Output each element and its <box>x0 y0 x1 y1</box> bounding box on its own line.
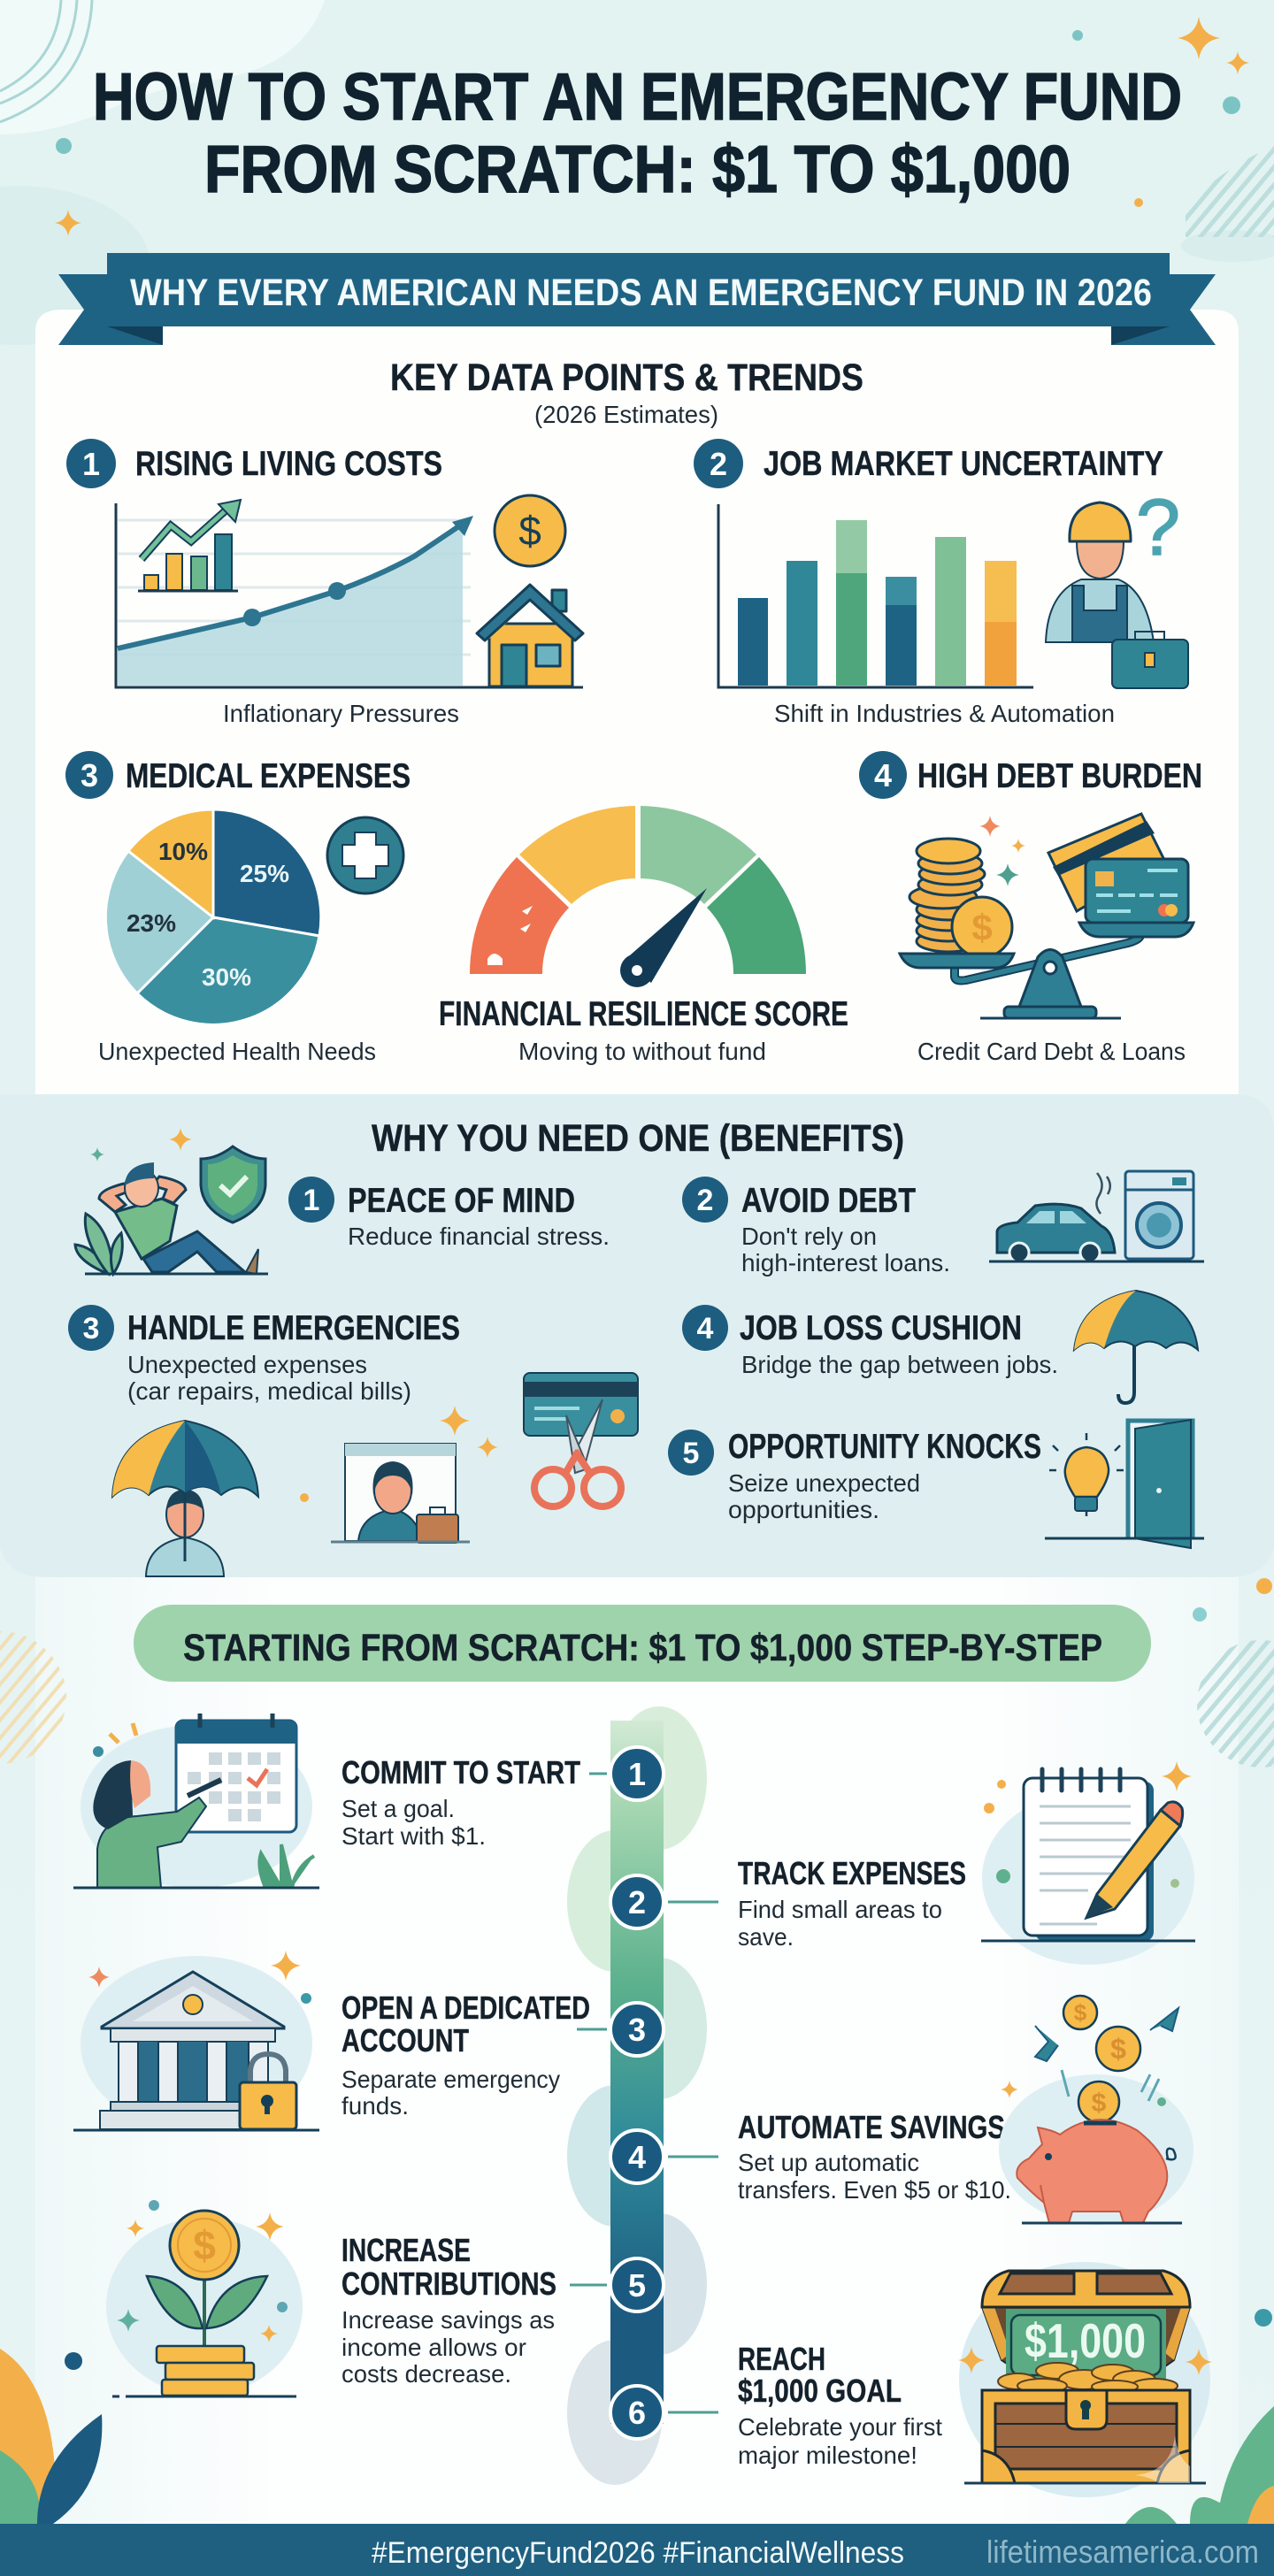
icon: umbrella <box>1074 1291 1198 1403</box>
benefit: job loss cushion: 4 <box>697 1312 714 1346</box>
benefit: opportunity knocks: 5 <box>683 1437 699 1470</box>
step 5: increase contributions <box>342 2232 556 2388</box>
icon: piggy bank with coins <box>999 1996 1193 2225</box>
step 1: commit to start <box>342 1754 580 1850</box>
benefit: job loss cushion: Bridge the gap between jobs. <box>741 1351 1058 1378</box>
benefit: opportunity knocks: Seize unexpected <box>728 1469 920 1497</box>
gauge: financial resilience score <box>439 806 848 1065</box>
panel: rising living costs <box>66 439 583 727</box>
benefit: opportunity knocks <box>668 1428 1041 1523</box>
lid <box>982 2271 1190 2307</box>
heading: key data points: KEY DATA POINTS & TRENDS <box>390 356 863 399</box>
panel: high debt burden: HIGH DEBT BURDEN <box>917 757 1202 795</box>
benefit: opportunity knocks: opportunities. <box>728 1496 879 1523</box>
benefit: handle emergencies: Unexpected expenses <box>127 1351 367 1378</box>
benefit: handle emergencies <box>68 1305 460 1405</box>
icon: piggy bank with coins: $ <box>1092 2089 1107 2118</box>
benefit: opportunity knocks: OPPORTUNITY KNOCKS <box>728 1428 1041 1466</box>
panel: job market uncertainty <box>694 439 1188 727</box>
icon: relaxed man with shield <box>75 1128 268 1274</box>
benefit: handle emergencies: (car repairs, medical bills) <box>127 1377 411 1405</box>
gauge: financial resilience score: FINANCIAL RESILIENCE SCORE <box>439 995 848 1033</box>
icon: person in browser window <box>300 1406 498 1543</box>
step 3: open a dedicated account: ACCOUNT <box>342 2022 469 2058</box>
icon: card and scissors <box>524 1373 638 1506</box>
panel: high debt burden <box>859 751 1202 1065</box>
step 6: reach goal: $1,000 GOAL <box>738 2373 902 2409</box>
benefit: avoid debt: 2 <box>697 1184 713 1217</box>
subheading: estimates: (2026 Estimates) <box>534 401 718 428</box>
gauge needle <box>620 888 707 987</box>
step 2: track expenses: save. <box>738 1923 794 1951</box>
icon: person under umbrella <box>112 1421 258 1576</box>
step 5: increase contributions: income allows or <box>342 2334 526 2361</box>
timeline <box>567 1706 718 2485</box>
benefit: avoid debt: Don't rely on <box>741 1223 877 1250</box>
step 2: track expenses <box>738 1855 966 1951</box>
panel: medical expenses: 23% <box>127 909 176 937</box>
panel: benefits band <box>0 1094 1274 1577</box>
icon: scale with coins and cards <box>900 814 1193 1018</box>
footer bar <box>0 2524 1274 2576</box>
panel: job market uncertainty: JOB MARKET UNCERTAINTY <box>764 445 1163 483</box>
icon: bank with lock <box>73 1951 319 2131</box>
panel: rising living costs: Inflationary Pressures <box>223 700 459 727</box>
step 6: reach goal: major milestone! <box>738 2442 917 2469</box>
icon: house <box>477 585 583 686</box>
icon: treasure chest with $1,000 <box>958 2262 1215 2515</box>
timeline: 2 <box>628 1884 646 1920</box>
panel: medical expenses <box>65 751 411 1065</box>
icon: mini growth chart <box>138 500 241 591</box>
icon: briefcase <box>1112 632 1188 688</box>
panel: medical expenses: Unexpected Health Needs <box>98 1038 376 1065</box>
icon: money plant <box>106 2200 303 2396</box>
connectors <box>570 1774 718 2412</box>
bill <box>1006 2309 1166 2380</box>
step 4: automate savings <box>738 2109 1011 2204</box>
benefit: peace of mind: 1 <box>303 1184 319 1217</box>
pie chart <box>105 809 321 1024</box>
benefit: avoid debt: high-interest loans. <box>741 1249 950 1276</box>
icon: light bulb and door <box>1045 1420 1204 1548</box>
timeline: 3 <box>628 2012 646 2048</box>
panel: rising living costs: 1 <box>82 446 100 482</box>
panel: medical expenses: MEDICAL EXPENSES <box>126 757 411 795</box>
timeline nodes <box>610 1747 664 2439</box>
step 4: automate savings: transfers. Even $5 or $10. <box>738 2176 1011 2204</box>
panel: rising living costs: RISING LIVING COSTS <box>135 445 442 483</box>
icon: worker with question mark <box>1046 484 1188 688</box>
panel: high debt burden: 4 <box>874 757 892 794</box>
body <box>982 2390 1190 2483</box>
benefit: avoid debt: AVOID DEBT <box>741 1182 916 1220</box>
timeline: 6 <box>628 2395 646 2431</box>
benefit: job loss cushion: JOB LOSS CUSHION <box>740 1309 1022 1347</box>
panel: medical expenses: 10% <box>158 838 208 865</box>
timeline: 5 <box>628 2267 646 2304</box>
step 3: open a dedicated account: OPEN A DEDICATED <box>342 1990 590 2026</box>
icon: worker with question mark: ? <box>1136 484 1180 572</box>
step 3: open a dedicated account: Separate emergency <box>342 2066 560 2093</box>
step-by-step heading pill <box>134 1605 1151 1682</box>
icon: notebook and pencil <box>981 1761 1195 1965</box>
step-by-step heading pill: STARTING FROM SCRATCH: $1 TO $1,000 STEP-BY-STEP <box>183 1627 1102 1669</box>
bill: $1,000 <box>1025 2313 1146 2368</box>
step 5: increase contributions: INCREASE <box>342 2232 471 2268</box>
timeline: 1 <box>628 1756 646 1792</box>
pale background decorations on panel <box>0 1577 1274 2528</box>
step 2: track expenses: Find small areas to <box>738 1896 942 1923</box>
step 5: increase contributions: costs decrease. <box>342 2360 511 2388</box>
decorative leaves bottom left <box>0 2349 102 2524</box>
step 5: increase contributions: CONTRIBUTIONS <box>342 2266 556 2302</box>
step 4: automate savings: AUTOMATE SAVINGS <box>738 2109 1005 2145</box>
step 2: track expenses: TRACK EXPENSES <box>738 1855 966 1891</box>
panel: job market uncertainty: Shift in Industries & Automation <box>774 700 1115 727</box>
icon: scale with coins and cards: $ <box>971 907 993 948</box>
step 5: increase contributions: Increase savings as <box>342 2306 555 2334</box>
banner ribbon <box>58 253 1216 345</box>
benefit: peace of mind: Reduce financial stress. <box>348 1223 610 1250</box>
icon: piggy bank with coins: $ <box>1110 2033 1126 2065</box>
step 1: commit to start: Set a goal. <box>342 1795 455 1822</box>
panel: medical expenses: 25% <box>240 860 289 887</box>
step 1: commit to start: Start with $1. <box>342 1822 486 1850</box>
benefit: handle emergencies: 3 <box>83 1312 99 1346</box>
decorative leaves bottom right <box>1125 2406 1274 2524</box>
panel: medical expenses: 3 <box>81 757 98 794</box>
icon: car and washing machine <box>989 1171 1204 1262</box>
heading: benefits: WHY YOU NEED ONE (BENEFITS) <box>372 1117 904 1160</box>
step 3: open a dedicated account <box>342 1990 590 2120</box>
step 6: reach goal: Celebrate your first <box>738 2413 942 2441</box>
benefit: peace of mind <box>288 1177 610 1250</box>
line chart <box>116 503 583 687</box>
title: FROM SCRATCH: $1 TO $1,000 <box>204 132 1071 206</box>
gauge: financial resilience score: Moving to without fund <box>518 1038 766 1065</box>
icon: woman with calendar <box>73 1714 319 1888</box>
icon: medical plus <box>327 817 403 893</box>
benefit: avoid debt <box>682 1177 950 1276</box>
panel: medical expenses: 30% <box>202 963 251 991</box>
coins <box>998 2363 1178 2393</box>
hashtags: #EmergencyFund2026 #FinancialWellness <box>372 2536 904 2570</box>
icon: piggy bank with coins: $ <box>1074 1999 1087 2026</box>
step 1: commit to start: COMMIT TO START <box>342 1754 580 1790</box>
banner text: WHY EVERY AMERICAN NEEDS AN EMERGENCY FUND IN 2026 <box>130 272 1152 314</box>
icon: dollar coin: $ <box>518 508 541 554</box>
benefit: job loss cushion <box>682 1305 1058 1378</box>
step 6: reach goal <box>738 2341 942 2469</box>
panel: high debt burden: Credit Card Debt & Loans <box>917 1038 1186 1065</box>
benefit: peace of mind: PEACE OF MIND <box>348 1182 575 1220</box>
step 3: open a dedicated account: funds. <box>342 2092 409 2120</box>
timeline: 4 <box>628 2139 646 2175</box>
benefit: handle emergencies: HANDLE EMERGENCIES <box>127 1309 460 1347</box>
step 4: automate savings: Set up automatic <box>738 2149 919 2176</box>
step 6: reach goal: REACH <box>738 2341 825 2377</box>
title <box>93 59 1182 206</box>
panel: job market uncertainty: 2 <box>710 446 727 482</box>
icon: money plant: $ <box>193 2222 216 2268</box>
icon: dollar coin <box>495 495 565 566</box>
bar chart <box>718 504 1033 687</box>
